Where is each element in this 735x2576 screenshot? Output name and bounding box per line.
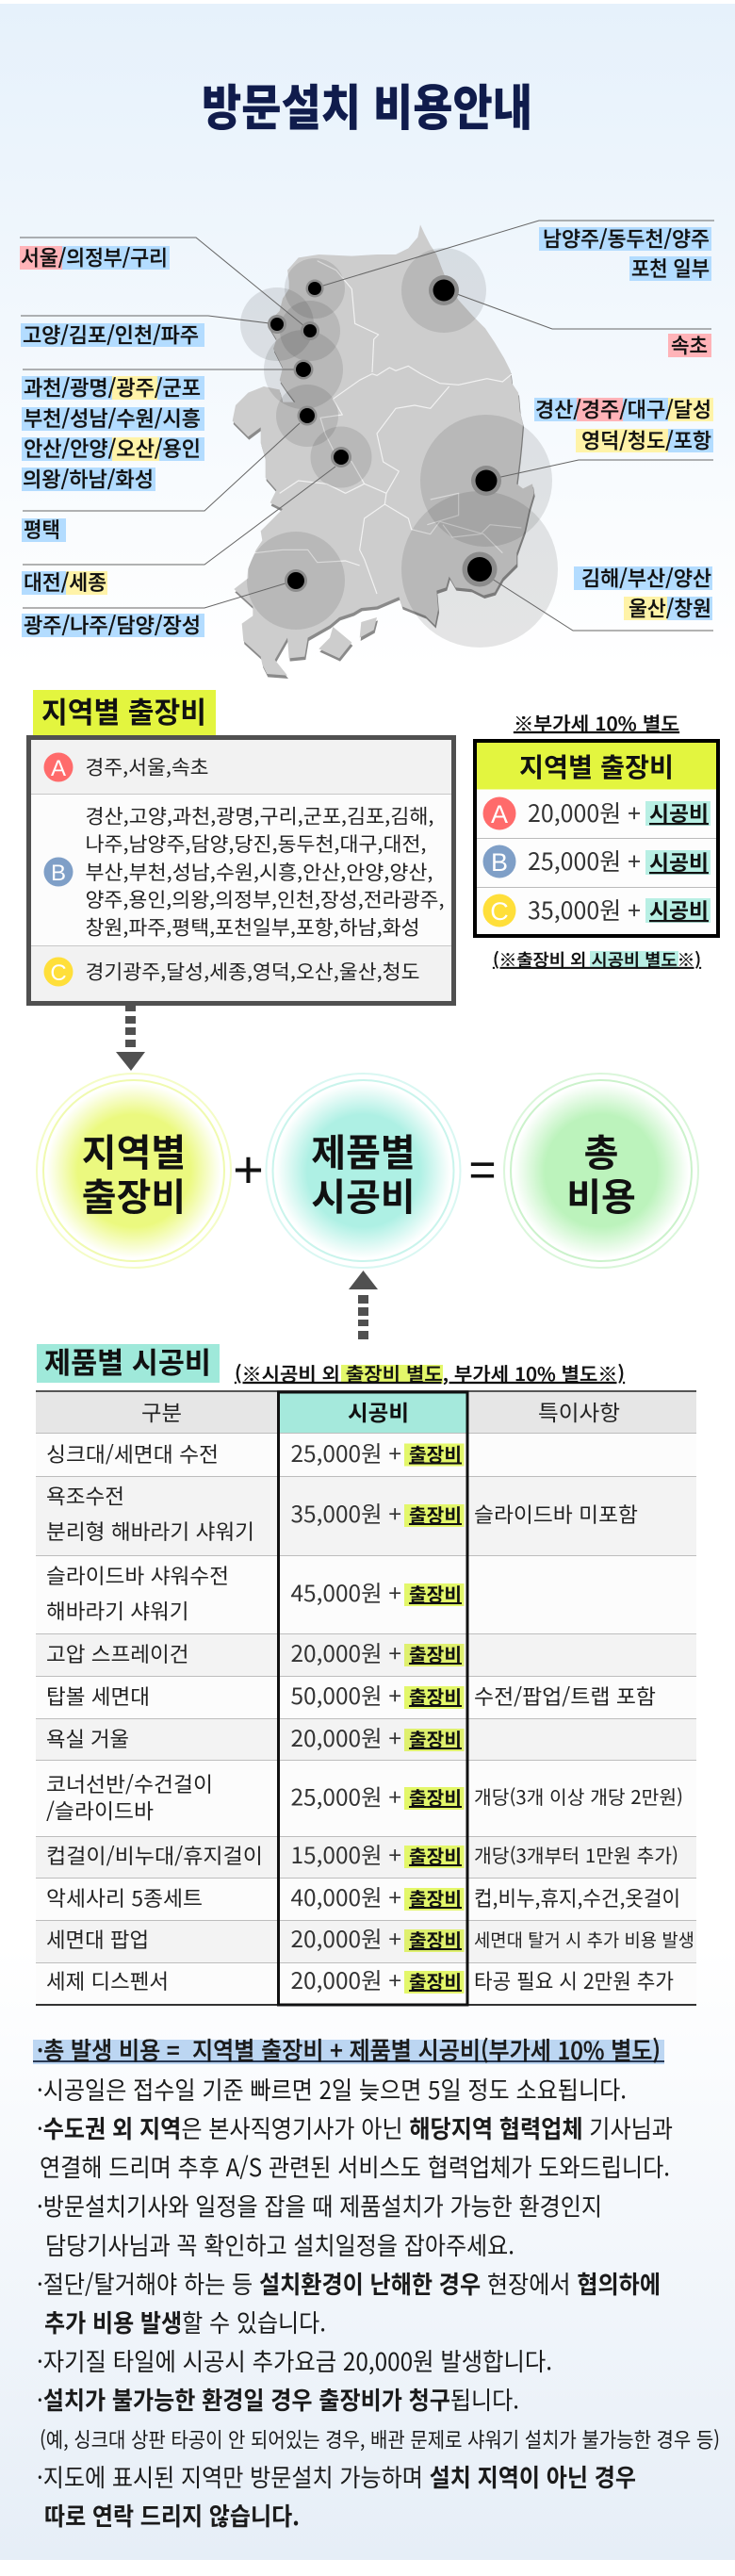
location dots xyxy=(268,275,501,592)
row: top bowl basin: 수전/팝업/트랩 포함 xyxy=(474,1681,656,1711)
row: detergent dispenser: 20,000원 + xyxy=(290,1962,401,1995)
map landmass xyxy=(233,224,535,679)
row: top bowl basin: 출장비 xyxy=(409,1682,462,1710)
group B: 부산,부천,성남,수원,시흥,안산,안양,양산, xyxy=(85,858,433,886)
label: Namyangju group: 남양주/동두천/양주 xyxy=(543,222,710,253)
row: tub faucet: 35,000원 + xyxy=(290,1496,401,1529)
note: difficult environment: 추가 비용 발생할 수 있습니다. xyxy=(44,2305,326,2339)
row: bathroom mirror: 출장비 xyxy=(409,1725,462,1752)
row: top bowl basin: 50,000원 + xyxy=(290,1678,401,1711)
circle: per-product construction fee: 제품별 xyxy=(311,1123,416,1177)
row: tub faucet: 출장비 xyxy=(409,1501,462,1528)
note: outside metro area: 연결해 드리며 추후 A/S 관련된 서비스도 협력업체가 도와드립니다. xyxy=(40,2149,670,2184)
row: tub faucet xyxy=(46,1480,638,1546)
note: porcelain tile surcharge: ·자기질 타일에 시공시 추가요금 20,000원 발생합니다. xyxy=(37,2343,552,2378)
row: cup holder: 컵걸이/비누대/휴지걸이 xyxy=(46,1840,263,1870)
note: impossible install xyxy=(37,2382,720,2454)
row: corner shelf: 출장비 xyxy=(409,1783,462,1811)
label: Seoul group: 서울/의정부/구리 xyxy=(21,241,168,271)
label: Gwacheon group: 과천/광명/광주/군포 xyxy=(24,371,201,402)
label: Namyangju group: 포천 일부 xyxy=(631,253,710,283)
notes section xyxy=(33,2032,720,2533)
row: tub faucet: 슬라이드바 미포함 xyxy=(474,1499,638,1529)
group B: 경산,고양,과천,광명,구리,군포,김포,김해, xyxy=(85,801,433,829)
row: basin pop-up: 세면대 탈거 시 추가 비용 발생 xyxy=(474,1927,694,1952)
arrow: down to regional circle xyxy=(116,1006,145,1071)
group A: 경주,서울,속초 xyxy=(85,752,209,780)
label: Gimhae group: 김해/부산/양산 xyxy=(581,562,711,592)
label: Gwacheon group: 안산/안양/오산/용인 xyxy=(24,433,201,463)
note: construction fee separate: (※출장비 외 시공비 별도※) xyxy=(493,947,701,972)
circle: regional travel fee: 출장비 xyxy=(82,1167,186,1222)
group B xyxy=(43,801,445,941)
circle: per-product construction fee: 시공비 xyxy=(311,1167,416,1222)
row: bathroom mirror xyxy=(46,1720,464,1753)
row: cup holder xyxy=(46,1837,678,1870)
note: outside metro area: ·수도권 외 지역은 본사직영기사가 아닌 해당지역 협력업체 기사님과 xyxy=(37,2110,673,2145)
row: cup holder: 개당(3개부터 1만원 추가) xyxy=(474,1841,678,1868)
row B: B xyxy=(491,848,508,877)
panel: region groups xyxy=(28,737,454,1003)
row: basin pop-up: 20,000원 + xyxy=(290,1921,401,1954)
row C: 시공비 xyxy=(649,894,709,925)
row A xyxy=(482,796,710,829)
row: spray gun: 20,000원 + xyxy=(290,1635,401,1668)
group B: B xyxy=(51,861,66,886)
row: tub faucet: 욕조수전 xyxy=(46,1480,124,1510)
row: corner shelf: 코너선반/수건걸이 xyxy=(46,1768,213,1798)
row B xyxy=(482,844,710,878)
table header row xyxy=(141,1395,620,1427)
row: detergent dispenser: 세제 디스펜서 xyxy=(46,1965,169,1995)
note: schedule: ·시공일은 접수일 기준 빠르면 2일 늦으면 5일 정도 소요됩니다. xyxy=(37,2072,627,2107)
circle: total cost: 총 xyxy=(584,1123,618,1177)
row: top bowl basin: 탑볼 세면대 xyxy=(46,1681,150,1711)
row: sink faucet xyxy=(46,1436,464,1468)
row: accessory set: 컵,비누,휴지,수건,옷걸이 xyxy=(474,1882,680,1912)
row: basin pop-up: 세면대 팝업 xyxy=(46,1924,149,1954)
table header row: 구분 xyxy=(141,1395,182,1427)
note: service areas only: ·지도에 표시된 지역만 방문설치 가능하며 설치 지역이 아닌 경우 xyxy=(37,2459,636,2494)
row: slide bar shower: 슬라이드바 샤워수전 xyxy=(46,1560,229,1590)
row: sink faucet: 25,000원 + xyxy=(290,1436,401,1468)
row C xyxy=(482,893,710,927)
label: Gimhae group: 울산/창원 xyxy=(629,592,711,622)
label: Gyeongsan group: 영덕/청도/포항 xyxy=(581,424,711,454)
row: spray gun xyxy=(46,1635,464,1668)
row: corner shelf: /슬라이드바 xyxy=(46,1795,154,1825)
note: total cost formula: ·총 발생 비용 = 지역별 출장비 + 제품별 시공비(부가세 10% 별도) xyxy=(37,2032,661,2067)
arrow: up to product circle xyxy=(349,1271,378,1339)
label: Goyang group: 고양/김포/인천/파주 xyxy=(23,319,199,349)
row: cup holder: 출장비 xyxy=(409,1842,462,1869)
row: slide bar shower: 출장비 xyxy=(409,1580,462,1607)
row: slide bar shower: 해바라기 샤워기 xyxy=(46,1595,188,1625)
label: Pyeongtaek: 평택 xyxy=(24,514,60,544)
row: corner shelf: 개당(3개 이상 개당 2만원) xyxy=(474,1782,683,1810)
circle: total cost: 비용 xyxy=(566,1167,636,1222)
row A: 20,000원 + xyxy=(528,796,641,829)
row A: A xyxy=(491,800,508,829)
VAT note: ※부가세 10% 별도 xyxy=(514,709,679,736)
row: spray gun: 출장비 xyxy=(409,1640,462,1667)
note: confirm environment: ·방문설치기사와 일정을 잡을 때 제품설치가 가능한 환경인지 xyxy=(37,2189,602,2223)
row: slide bar shower xyxy=(46,1560,464,1625)
label: Gimhae group xyxy=(574,562,712,622)
map of South Korea xyxy=(20,221,714,679)
row: accessory set: 출장비 xyxy=(409,1884,462,1911)
label: Gwacheon group: 부천/성남/수원/시흥 xyxy=(24,402,201,433)
row B: 시공비 xyxy=(649,846,709,877)
row: accessory set: 악세사리 5종세트 xyxy=(46,1882,203,1912)
row: corner shelf xyxy=(46,1768,683,1825)
note: confirm environment: 담당기사님과 꼭 확인하고 설치일정을 잡아주세요. xyxy=(45,2227,514,2262)
note: difficult environment: ·절단/탈거해야 하는 등 설치환경이 난해한 경우 현장에서 협의하에 xyxy=(37,2266,661,2301)
group C: 경기광주,달성,세종,영덕,오산,울산,청도 xyxy=(85,958,419,986)
group C: C xyxy=(50,960,67,986)
row: slide bar shower: 45,000원 + xyxy=(290,1575,401,1608)
table header: 지역별 출장비 xyxy=(519,747,674,785)
heading tag: per-product fee: 제품별 시공비 xyxy=(44,1339,211,1382)
title: 방문설치 비용안내 xyxy=(202,69,532,139)
label: Namyangju group xyxy=(539,222,711,283)
circle: regional travel fee xyxy=(37,1074,231,1268)
row: detergent dispenser: 타공 필요 시 2만원 추가 xyxy=(474,1965,674,1995)
row: detergent dispenser: 출장비 xyxy=(409,1967,462,1994)
label: Gwacheon group xyxy=(22,371,204,494)
label: Gyeongsan group: 경산/경주/대구/달성 xyxy=(535,394,711,424)
row: accessory set xyxy=(46,1879,680,1912)
table backgrounds xyxy=(36,1390,696,2006)
note: service areas only xyxy=(37,2459,636,2533)
row: tub faucet: 분리형 해바라기 샤워기 xyxy=(46,1516,254,1546)
heading tag: regional travel fee: 지역별 출장비 xyxy=(41,689,206,731)
panel: regional fee table xyxy=(475,741,718,936)
row: basin pop-up: 출장비 xyxy=(409,1926,462,1953)
group A: A xyxy=(51,756,66,781)
label: Gwacheon group: 의왕/하남/화성 xyxy=(23,464,154,494)
note: difficult environment xyxy=(37,2266,661,2339)
region labels xyxy=(20,222,713,639)
leader lines xyxy=(20,221,714,631)
row: cup holder: 15,000원 + xyxy=(290,1837,401,1870)
row: top bowl basin xyxy=(46,1678,656,1711)
panel: product fee table xyxy=(36,1390,696,2006)
row: bathroom mirror: 20,000원 + xyxy=(290,1720,401,1753)
note: service areas only: 따로 연락 드리지 않습니다. xyxy=(44,2498,300,2533)
table header row: 시공비 xyxy=(348,1395,409,1427)
row A: 시공비 xyxy=(649,797,709,828)
row: basin pop-up xyxy=(46,1921,694,1954)
label: Daejeon Sejong: 대전/세종 xyxy=(24,566,106,597)
circle: regional travel fee: 지역별 xyxy=(82,1123,186,1177)
note: impossible install: ·설치가 불가능한 환경일 경우 출장비가 청구됩니다. xyxy=(37,2382,519,2417)
table header xyxy=(477,743,716,790)
note: travel fee and VAT separate: (※시공비 외 출장비 별도, 부가세 10% 별도※) xyxy=(235,1359,625,1386)
table header row: 특이사항 xyxy=(538,1395,620,1427)
row B: 25,000원 + xyxy=(528,844,641,878)
row: sink faucet: 출장비 xyxy=(409,1440,462,1467)
circle: total cost xyxy=(504,1074,698,1268)
group B: 창원,파주,평택,포천일부,포항,하남,화성 xyxy=(85,912,419,941)
group B: 나주,남양주,담양,당진,동두천,대구,대전, xyxy=(85,829,426,858)
circle: per-product construction fee xyxy=(266,1074,460,1268)
label: Sokcho: 속초 xyxy=(671,330,708,360)
coverage circles xyxy=(240,248,558,648)
plus sign: + xyxy=(233,1140,264,1199)
row C: 35,000원 + xyxy=(528,893,641,927)
group B: 양주,용인,의왕,의정부,인천,장성,전라광주, xyxy=(85,885,445,913)
row: bathroom mirror: 욕실 거울 xyxy=(46,1723,129,1753)
note: outside metro area xyxy=(37,2110,673,2184)
note: confirm environment xyxy=(37,2189,602,2262)
highlighted fee column border xyxy=(279,1392,467,2005)
row: spray gun: 고압 스프레이건 xyxy=(46,1638,188,1668)
row: accessory set: 40,000원 + xyxy=(290,1879,401,1912)
row: detergent dispenser xyxy=(46,1962,674,1995)
label: Gyeongsan group xyxy=(534,394,713,454)
label: Gwangju group: 광주/나주/담양/장성 xyxy=(24,609,201,639)
row: sink faucet: 싱크대/세면대 수전 xyxy=(46,1438,219,1468)
equals sign: = xyxy=(468,1143,497,1196)
row C: C xyxy=(490,897,509,926)
row: corner shelf: 25,000원 + xyxy=(290,1780,401,1812)
